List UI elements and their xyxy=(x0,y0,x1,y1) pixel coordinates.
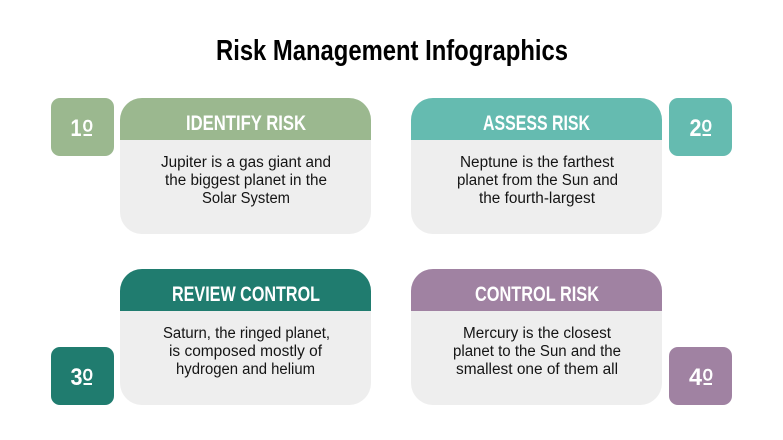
card header: CONTROL RISK xyxy=(475,283,599,306)
number badge 4: 4 xyxy=(689,364,703,391)
description xyxy=(453,325,621,378)
description: smallest one of them all xyxy=(456,361,618,378)
number badge 2: º xyxy=(702,115,712,148)
card header xyxy=(120,269,371,311)
card header: IDENTIFY RISK xyxy=(186,112,306,135)
description: planet from the Sun and xyxy=(457,172,618,189)
card header: REVIEW CONTROL xyxy=(172,283,320,306)
description xyxy=(163,325,330,378)
card body xyxy=(120,140,371,234)
number badge 2 xyxy=(669,98,732,156)
number badge 3: º xyxy=(83,364,93,397)
number badge 1 xyxy=(51,98,114,156)
number badge 2: 2 xyxy=(690,115,702,142)
description: Solar System xyxy=(202,190,290,207)
card header xyxy=(411,98,662,140)
description: the biggest planet in the xyxy=(165,172,327,189)
description: is composed mostly of xyxy=(169,343,323,360)
number badge 3 xyxy=(51,347,114,405)
number badge 1: 1 xyxy=(70,115,82,142)
number badge 4 xyxy=(669,347,732,405)
description: Mercury is the closest xyxy=(463,325,612,342)
panel: review control xyxy=(51,269,371,405)
number badge 4: º xyxy=(703,364,713,397)
card body xyxy=(411,140,662,234)
description: Jupiter is a gas giant and xyxy=(161,154,331,171)
description: Neptune is the farthest xyxy=(460,154,615,171)
description xyxy=(457,154,618,207)
number badge 1: º xyxy=(83,115,93,148)
panel: control risk xyxy=(411,269,732,405)
card header: ASSESS RISK xyxy=(483,112,590,135)
description: the fourth-largest xyxy=(479,190,596,207)
number badge 3: 3 xyxy=(70,364,82,391)
description: Saturn, the ringed planet, xyxy=(163,325,330,342)
title: Risk Management Infographics xyxy=(216,35,568,67)
description: planet to the Sun and the xyxy=(453,343,621,360)
card body xyxy=(411,311,662,405)
panel: identify risk xyxy=(51,98,371,234)
card header xyxy=(120,98,371,140)
card header xyxy=(411,269,662,311)
description: hydrogen and helium xyxy=(176,361,315,378)
card body xyxy=(120,311,371,405)
description xyxy=(161,154,331,207)
panel: assess risk xyxy=(411,98,732,234)
